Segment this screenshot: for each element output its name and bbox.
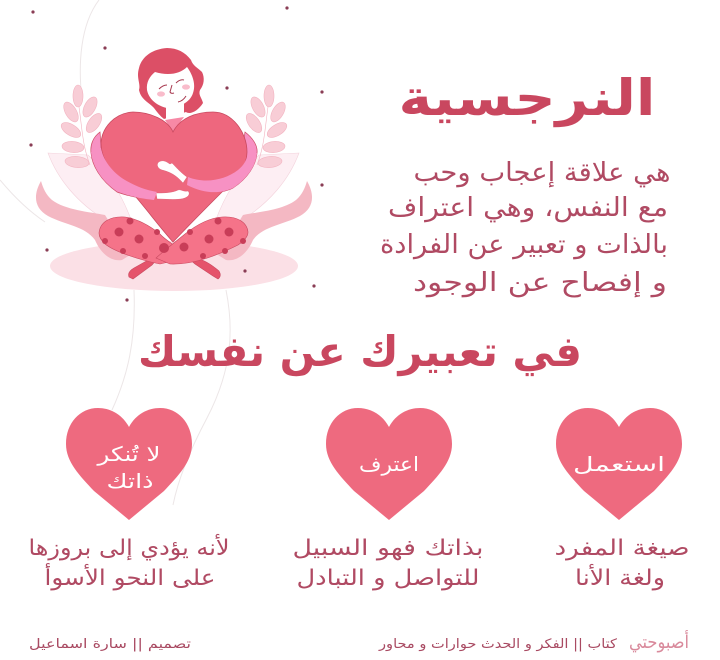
- back arms: [91, 132, 157, 200]
- title: النرجسية: [398, 69, 656, 128]
- caption: acknowledge: [292, 536, 484, 591]
- logo: أصبوحتي: [629, 630, 689, 653]
- legs: [99, 217, 248, 279]
- decorative dots: [29, 6, 324, 302]
- front arms: [91, 148, 157, 200]
- background leaves: [36, 153, 312, 260]
- right sprig: [243, 85, 289, 169]
- intro paragraph: بالذات و تعبير عن الفرادة: [380, 230, 668, 260]
- heart: use: استعمل: [573, 452, 665, 476]
- heart: acknowledge: [326, 408, 452, 520]
- caption: acknowledge: بذاتك فهو السبيل: [292, 536, 484, 561]
- caption: do not deny: لأنه يؤدي إلى بروزها: [28, 534, 230, 561]
- hair: [138, 48, 204, 119]
- heart: do not deny: [66, 408, 192, 520]
- credit: book: كتاب || الفكر و الحدث حوارات و محاور: [378, 637, 618, 652]
- credit: designer: تصميم || سارة اسماعيل: [29, 637, 191, 652]
- heart: do not deny: لا تُنكر: [96, 442, 160, 466]
- intro paragraph: و إفصاح عن الوجود: [413, 268, 667, 298]
- heart: do not deny: ذاتك: [106, 469, 154, 493]
- illustration: woman hugging heart: [36, 48, 312, 291]
- face: [147, 67, 194, 108]
- caption: use: ولغة الأنا: [575, 564, 665, 591]
- column: use: [554, 408, 690, 591]
- caption: use: صيغة المفرد: [554, 536, 690, 561]
- heart: use: [556, 408, 682, 520]
- heart: acknowledge: اعترف: [359, 452, 419, 476]
- intro paragraph: هي علاقة إعجاب وحب: [414, 158, 670, 188]
- column: acknowledge: [292, 408, 484, 591]
- caption: do not deny: [28, 534, 230, 591]
- intro paragraph: [380, 158, 670, 298]
- section heading: في تعبيرك عن نفسك: [138, 327, 582, 377]
- column: do not deny: [28, 408, 230, 591]
- caption: do not deny: على النحو الأسوأ: [44, 563, 216, 591]
- hands: [156, 190, 189, 199]
- facial features: [159, 80, 186, 102]
- intro paragraph: مع النفس، وهي اعتراف: [388, 193, 668, 223]
- neck and sweater: [166, 101, 184, 121]
- caption: use: [554, 536, 690, 591]
- caption: acknowledge: للتواصل و التبادل: [296, 566, 480, 591]
- big heart: [101, 112, 247, 242]
- ground ellipse: [50, 241, 298, 291]
- left sprig: [59, 85, 105, 169]
